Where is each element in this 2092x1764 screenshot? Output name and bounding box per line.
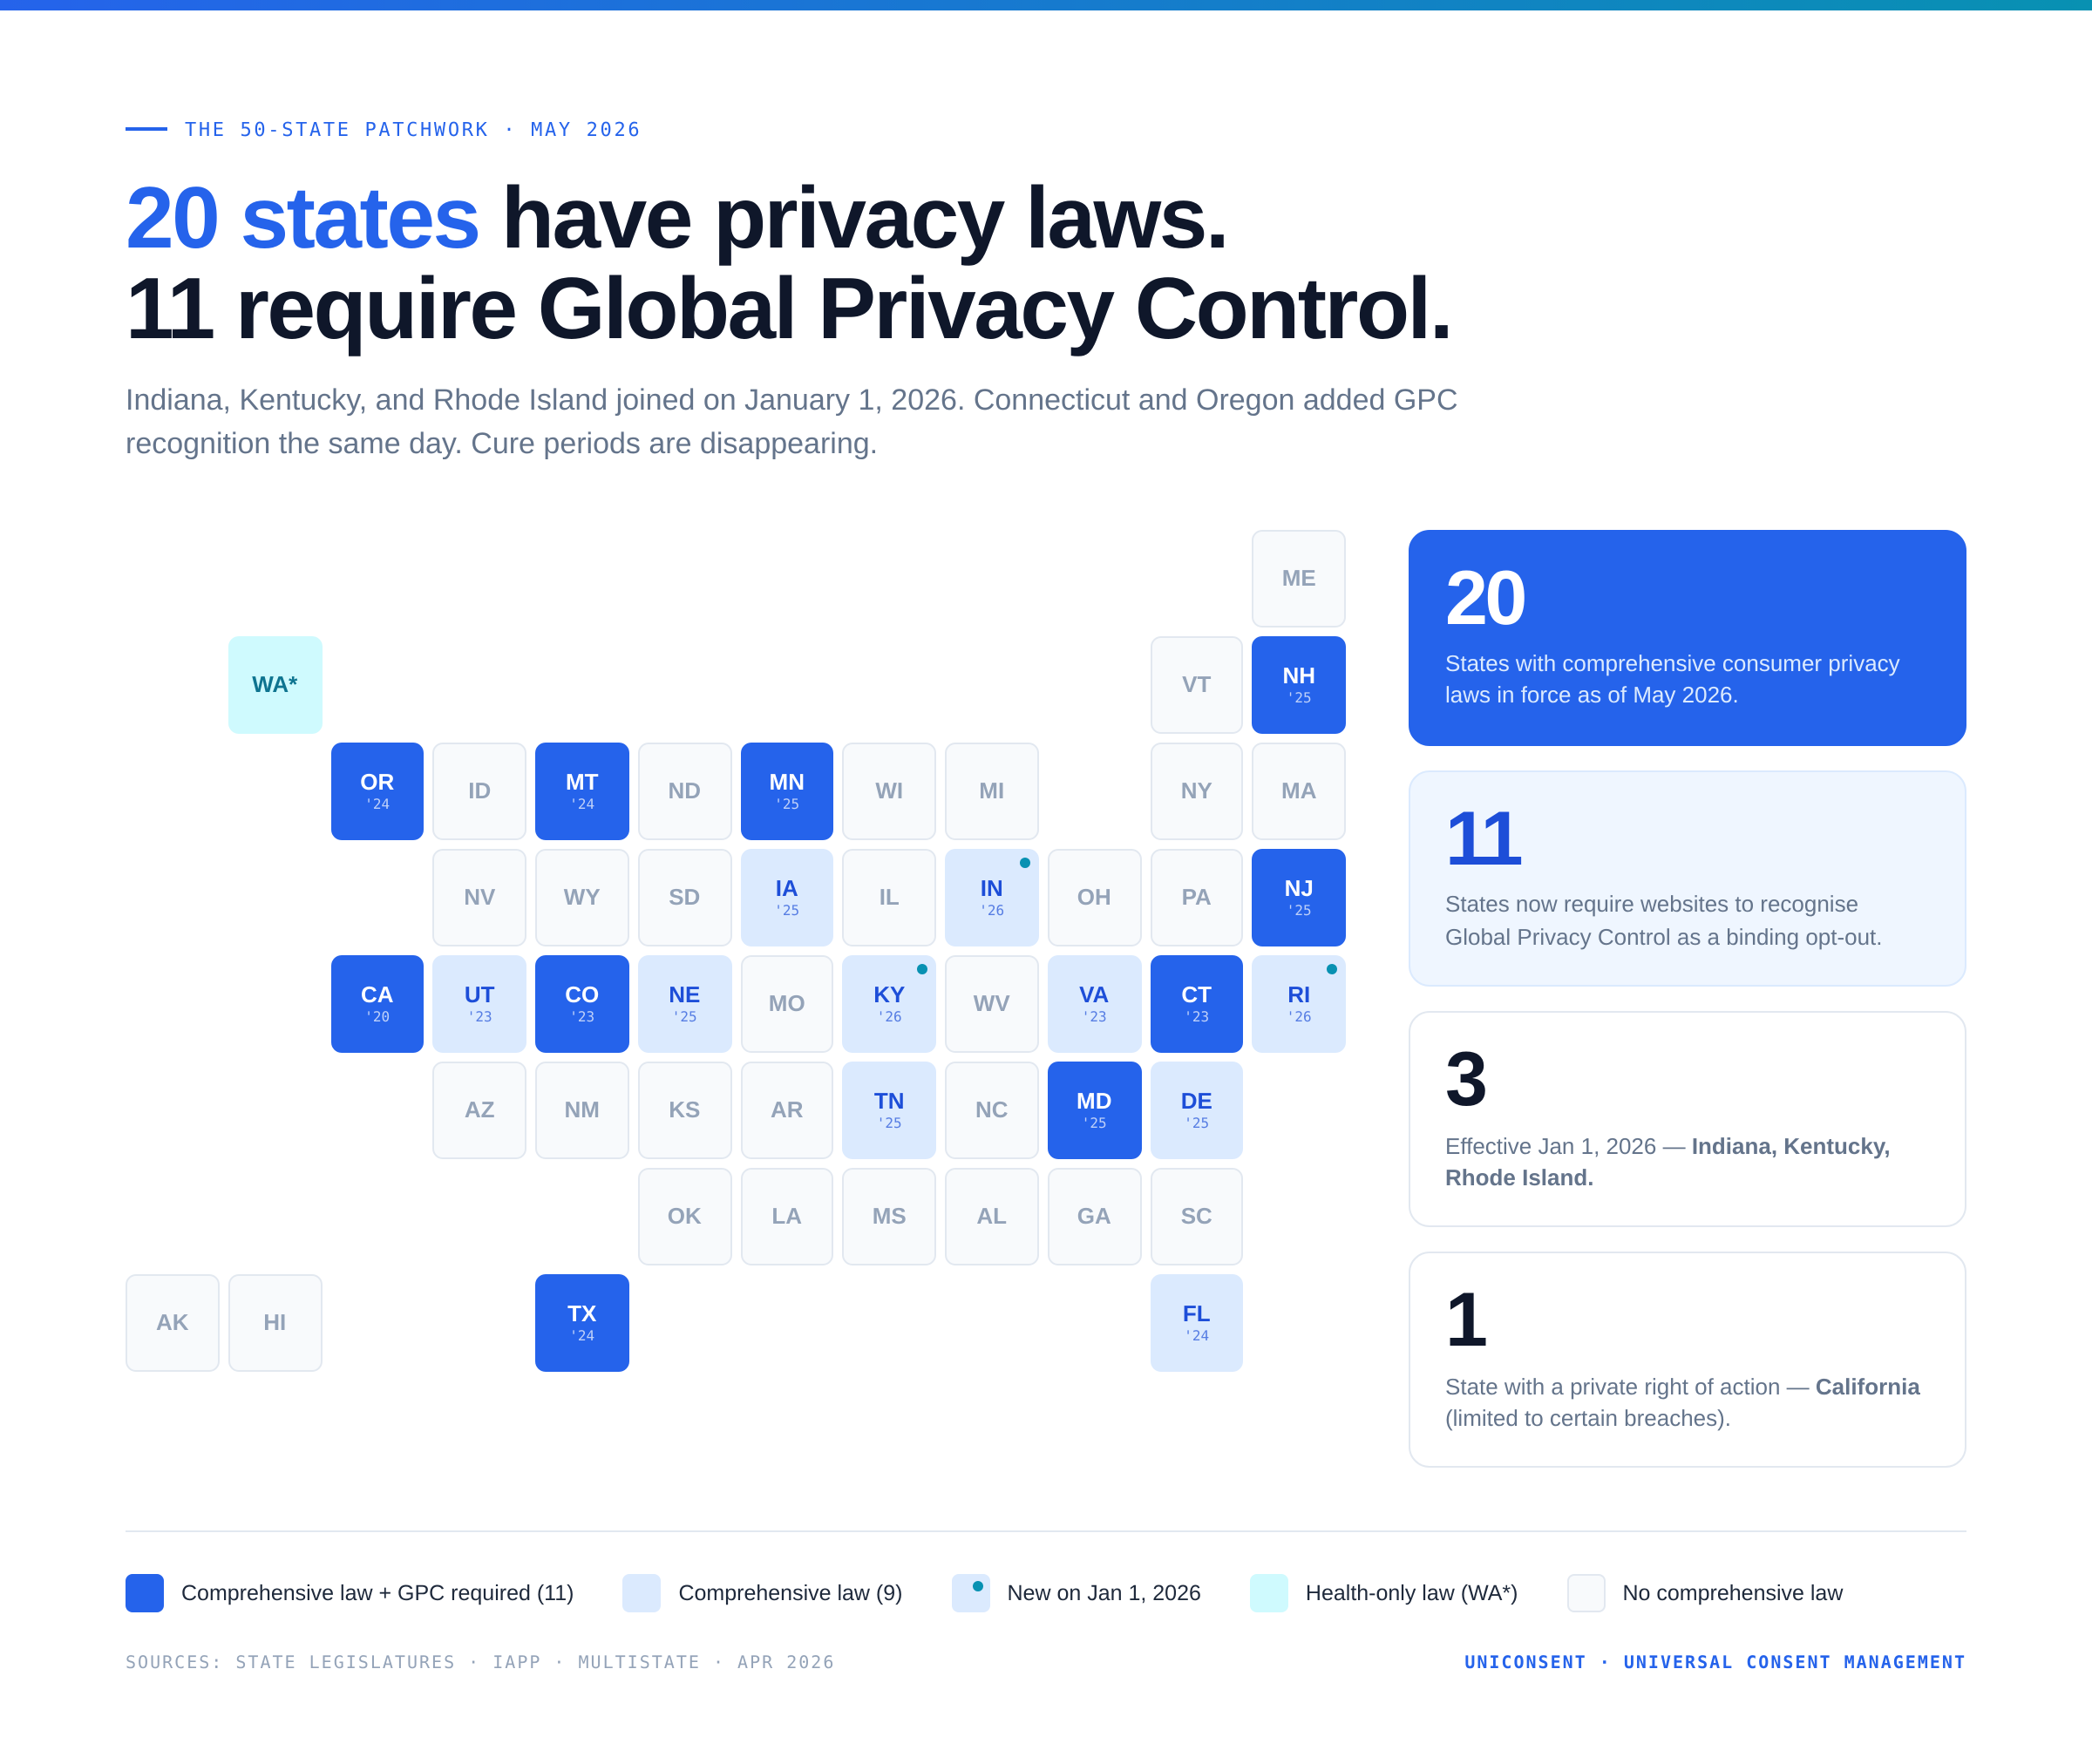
state tile: TX: '24 — [569, 1328, 594, 1344]
state tile: TX: TX — [567, 1300, 596, 1326]
state tile: LA — [740, 1168, 833, 1265]
state tile: MO — [740, 955, 833, 1053]
state tile: ME — [1252, 530, 1346, 628]
state tile: VA: '23 — [1082, 1009, 1107, 1025]
state tile: NY — [1150, 743, 1243, 840]
legend item: health-only law — [1250, 1574, 1518, 1612]
state tile: MN — [740, 743, 833, 840]
state tile: MN: MN — [770, 769, 805, 795]
state tile: UT — [432, 955, 526, 1053]
state tile: CT — [1150, 955, 1243, 1053]
state tile: KY: KY — [873, 981, 905, 1008]
state tile: SC — [1150, 1168, 1243, 1265]
stat card: 20 states: States with comprehensive consumer privacy — [1445, 651, 1900, 677]
state tile: DE: '25 — [1184, 1116, 1209, 1131]
footer sources: SOURCES: STATE LEGISLATURES · IAPP · MULTISTATE · APR 2026 — [126, 1654, 835, 1673]
state tile: LA: LA — [771, 1203, 802, 1229]
state tile: WI — [842, 743, 936, 840]
eyebrow label: THE 50-STATE PATCHWORK · MAY 2026 — [185, 119, 642, 141]
state tile: FL: FL — [1183, 1300, 1211, 1326]
state tile: MA: MA — [1281, 777, 1316, 804]
state tile: MI: MI — [979, 777, 1004, 804]
state tile: NV: NV — [464, 884, 495, 910]
state tile: NJ: '25 — [1287, 903, 1312, 919]
state tile: AL: AL — [976, 1203, 1007, 1229]
state tile: TN — [842, 1062, 936, 1159]
state tile: OK: OK — [668, 1203, 702, 1229]
state tile: IL: IL — [880, 884, 900, 910]
state tile: AL — [945, 1168, 1039, 1265]
state tile: VA — [1048, 955, 1141, 1053]
state tile: NE: NE — [669, 981, 700, 1008]
title: 20 states have privacy laws. — [126, 169, 1227, 267]
stat card: 11 states: 11 — [1445, 797, 1520, 882]
state tile: CA: '20 — [364, 1009, 390, 1025]
top gradient bar — [0, 0, 2092, 10]
state tile: RI: '26 — [1287, 1009, 1312, 1025]
state tile: IN: '26 — [979, 903, 1004, 919]
state tile: GA — [1048, 1168, 1141, 1265]
stat card: 3 states: 3 — [1445, 1037, 1484, 1123]
legend item: no comprehensive law: No comprehensive law — [1623, 1581, 1843, 1605]
state tile: ID: ID — [468, 777, 491, 804]
title — [126, 169, 1451, 357]
state tile: UT: UT — [465, 981, 495, 1008]
state tile: MT: MT — [566, 769, 599, 795]
state tile: CA: CA — [361, 981, 394, 1008]
subtitle — [126, 383, 1458, 460]
state tile: KY: '26 — [877, 1009, 902, 1025]
state tile: MD: MD — [1077, 1088, 1111, 1114]
state tile: NV — [432, 849, 526, 946]
state tile: CT: '23 — [1184, 1009, 1209, 1025]
state tile: IA: '25 — [774, 903, 799, 919]
state tile: MT — [535, 743, 629, 840]
subtitle: Indiana, Kentucky, and Rhode Island joined on January 1, 2026. Connecticut and Oregon added GPC — [126, 383, 1458, 417]
state tile: PA: PA — [1182, 884, 1212, 910]
state tile: GA: GA — [1077, 1203, 1111, 1229]
state tile: NC: NC — [975, 1096, 1009, 1123]
state tile: AK: AK — [156, 1309, 189, 1335]
state tile: OR: OR — [360, 769, 394, 795]
state tile: NJ — [1252, 849, 1346, 946]
state tile: KS: KS — [669, 1096, 700, 1123]
footer brand: UNICONSENT · UNIVERSAL CONSENT MANAGEMENT — [1464, 1654, 1966, 1673]
stat card: 1 state — [1409, 1252, 1966, 1468]
state tile: NM — [535, 1062, 629, 1159]
legend item: no comprehensive law — [1567, 1574, 1843, 1612]
state tile: OR — [330, 743, 424, 840]
legend item: health-only law: Health-only law (WA*) — [1306, 1581, 1518, 1605]
stat card: 1 state: (limited to certain breaches). — [1445, 1406, 1731, 1432]
tile grid map of US states — [126, 530, 1346, 1372]
subtitle: recognition the same day. Cure periods are disappearing. — [126, 427, 878, 460]
state tile: UT: '23 — [467, 1009, 492, 1025]
state tile: SC: SC — [1181, 1203, 1212, 1229]
state tile: CO: '23 — [569, 1009, 594, 1025]
stat card: 20 states: laws in force as of May 2026. — [1445, 682, 1739, 709]
state tile: FL — [1150, 1274, 1243, 1372]
state tile: MT: '24 — [569, 797, 594, 812]
state tile: NE: '25 — [672, 1009, 697, 1025]
state tile: MN: '25 — [774, 797, 799, 812]
state tile: CT: CT — [1181, 981, 1212, 1008]
stat card: 11 states — [1409, 770, 1966, 987]
state tile: AK — [126, 1274, 220, 1372]
state tile: ND — [638, 743, 731, 840]
state tile: WA — [228, 636, 322, 734]
state tile: OR: '24 — [364, 797, 390, 812]
state tile: NY: NY — [1181, 777, 1212, 804]
state tile: MD — [1048, 1062, 1141, 1159]
state tile: TN: '25 — [877, 1116, 902, 1131]
state tile: NM: NM — [565, 1096, 600, 1123]
state tile: IA — [740, 849, 833, 946]
state tile: ME: ME — [1282, 565, 1316, 591]
state tile: NJ: NJ — [1285, 875, 1314, 901]
stat card: 1 state: 1 — [1445, 1278, 1484, 1363]
state tile: NH: '25 — [1287, 690, 1312, 706]
legend item: GPC required: Comprehensive law + GPC required (11) — [181, 1581, 574, 1605]
state tile: NC — [945, 1062, 1039, 1159]
state tile: WA: WA* — [252, 671, 297, 697]
stat card: 3 states — [1409, 1011, 1966, 1227]
state tile: OK — [638, 1168, 731, 1265]
state tile: CO: CO — [565, 981, 599, 1008]
stat card: 11 states: States now require websites to recognise — [1445, 892, 1858, 918]
stat card: 20 states — [1409, 530, 1966, 746]
stat card: 3 states: Rhode Island. — [1445, 1164, 1593, 1191]
state tile: MD: '25 — [1082, 1116, 1107, 1131]
state tile: CO — [535, 955, 629, 1053]
state tile: KY — [842, 955, 936, 1053]
state tile: AZ: AZ — [465, 1096, 495, 1123]
state tile: SD: SD — [669, 884, 700, 910]
state tile: DE — [1150, 1062, 1243, 1159]
state tile: WY: WY — [564, 884, 601, 910]
state tile: NH — [1252, 636, 1346, 734]
state tile: WV: WV — [974, 990, 1010, 1016]
state tile: NH: NH — [1282, 662, 1315, 689]
state tile: MS: MS — [873, 1203, 907, 1229]
state tile: MS — [842, 1168, 936, 1265]
stat card: 11 states: Global Privacy Control as a binding opt-out. — [1445, 923, 1883, 949]
state tile: SD — [638, 849, 731, 946]
title: 11 require Global Privacy Control. — [126, 260, 1451, 357]
legend item: comprehensive law — [622, 1574, 903, 1612]
state tile: TN: TN — [874, 1088, 905, 1114]
state tile: HI — [228, 1274, 322, 1372]
state tile: VT — [1150, 636, 1243, 734]
legend item: new on Jan 1 2026: New on Jan 1, 2026 — [1008, 1581, 1201, 1605]
state tile: RI — [1252, 955, 1346, 1053]
state tile: VA: VA — [1079, 981, 1109, 1008]
state tile: DE: DE — [1181, 1088, 1212, 1114]
state tile: PA — [1150, 849, 1243, 946]
state tile: KS — [638, 1062, 731, 1159]
state tile: IN — [945, 849, 1039, 946]
state tile: IA: IA — [776, 875, 798, 901]
state tile: WV — [945, 955, 1039, 1053]
state tile: OH: OH — [1077, 884, 1111, 910]
state tile: WI: WI — [875, 777, 903, 804]
state tile: AR: AR — [771, 1096, 804, 1123]
state tile: AZ — [432, 1062, 526, 1159]
state tile: MI — [945, 743, 1039, 840]
state tile: AR — [740, 1062, 833, 1159]
state tile: MA — [1252, 743, 1346, 840]
state tile: ND: ND — [668, 777, 701, 804]
stat card: 20 states: 20 — [1445, 556, 1525, 641]
legend item: new on Jan 1 2026 — [952, 1574, 1201, 1612]
stat card: 3 states: Effective Jan 1, 2026 — Indiana, Kentucky, — [1445, 1133, 1891, 1159]
state tile: VT: VT — [1182, 671, 1211, 697]
state tile: IL — [842, 849, 936, 946]
state tile: HI: HI — [263, 1309, 286, 1335]
state tile: NE — [638, 955, 731, 1053]
state tile: IN: IN — [981, 875, 1003, 901]
state tile: FL: '24 — [1184, 1328, 1209, 1344]
state tile: TX — [535, 1274, 629, 1372]
state tile: ID — [432, 743, 526, 840]
legend — [126, 1574, 1843, 1612]
legend item: GPC required — [126, 1574, 574, 1612]
stat card: 1 state: State with a private right of action — California — [1445, 1374, 1920, 1401]
state tile: RI: RI — [1287, 981, 1310, 1008]
state tile: OH — [1048, 849, 1141, 946]
state tile: CA — [330, 955, 424, 1053]
state tile: MO: MO — [769, 990, 805, 1016]
legend item: comprehensive law: Comprehensive law (9) — [678, 1581, 903, 1605]
state tile: WY — [535, 849, 629, 946]
